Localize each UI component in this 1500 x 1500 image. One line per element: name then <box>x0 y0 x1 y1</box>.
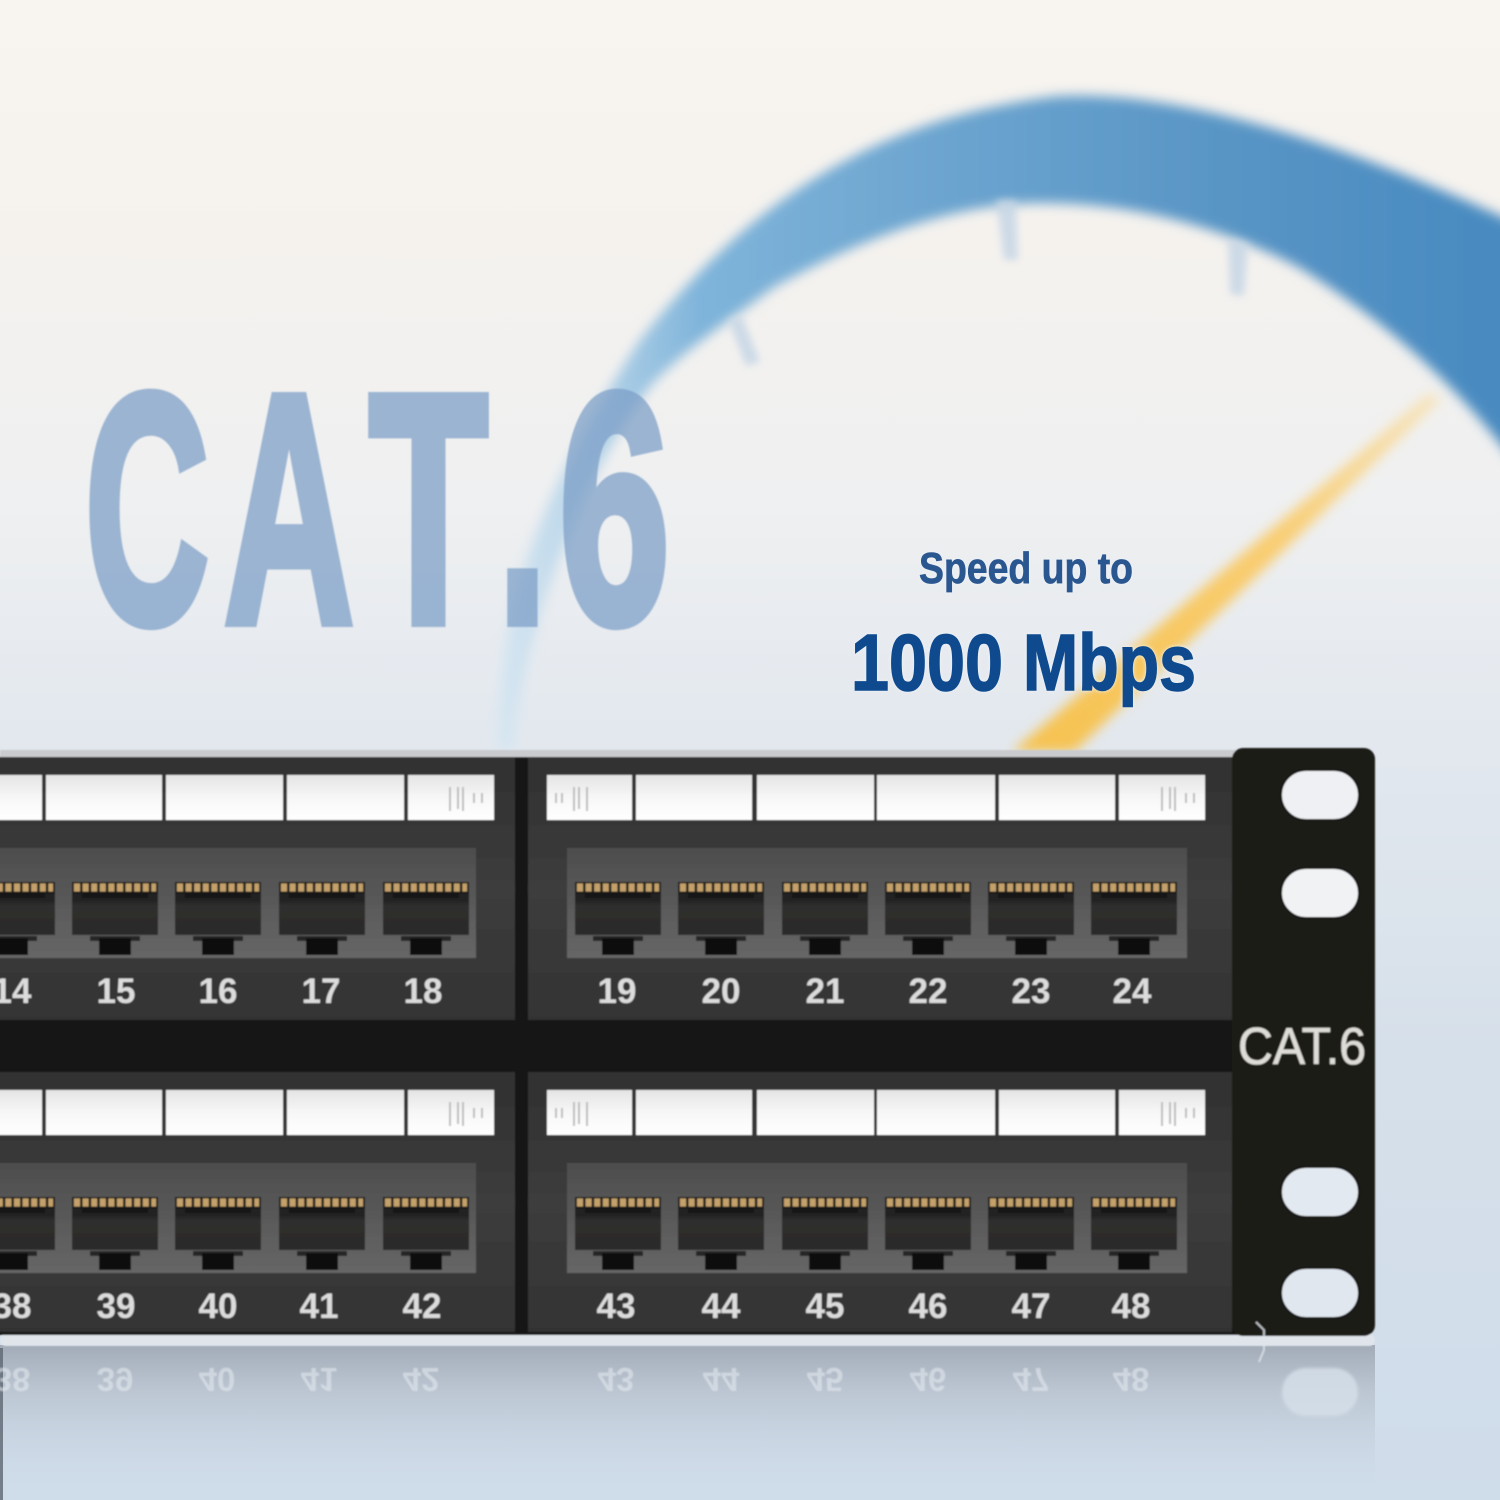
port numbers: 14-18 <box>0 972 442 1011</box>
heading: CAT.6: T <box>369 327 488 692</box>
speed gauge arc <box>498 96 1500 750</box>
port numbers: 19-24 <box>598 972 1152 1011</box>
heading: CAT.6 <box>85 327 670 692</box>
port numbers: 19-24: 20 <box>702 972 740 1011</box>
port numbers: 19-24: 22 <box>909 972 947 1011</box>
ear label: CAT.6: CAT.6 <box>1238 1018 1366 1076</box>
reflection under panel <box>0 1345 1375 1500</box>
reflection: mounting hole <box>1282 1368 1358 1416</box>
text: speed up to: Speed up to <box>919 544 1133 593</box>
heading: CAT.6: C <box>85 327 209 692</box>
panel top highlight <box>0 750 1240 758</box>
panel bottom highlight <box>0 1334 1375 1346</box>
port numbers: 38-42 <box>0 1287 441 1326</box>
gauge tick marks <box>728 200 1248 366</box>
reflection: left edge line <box>0 1348 3 1500</box>
port numbers: 14-18: 15 <box>97 972 135 1011</box>
panel section: bottom right <box>528 1072 1232 1332</box>
port numbers: 19-24: 19 <box>598 972 636 1011</box>
panel chassis <box>0 757 1240 1335</box>
port numbers: 19-24: 21 <box>806 972 844 1011</box>
port numbers: 43-48: 45 <box>806 1287 844 1326</box>
port numbers: 14-18: 17 <box>302 972 340 1011</box>
gauge needle <box>1012 394 1442 752</box>
panel section: top left <box>0 757 515 1020</box>
port numbers: 38-42: 42 <box>403 1287 441 1326</box>
port numbers: 14-18: 18 <box>404 972 442 1011</box>
reflection: port numbers: 44 <box>703 1361 740 1398</box>
reflection: port numbers: 45 <box>807 1361 843 1398</box>
port numbers: 38-42: 39 <box>97 1287 135 1326</box>
reflection: port numbers: 43 <box>598 1361 634 1398</box>
heading: CAT.6: 6 <box>559 327 670 692</box>
reflection: port numbers: 40 <box>199 1361 235 1398</box>
port numbers: 38-42: 41 <box>300 1287 338 1326</box>
port numbers: 43-48 <box>597 1287 1150 1326</box>
port numbers: 43-48: 46 <box>909 1287 947 1326</box>
rack ear <box>1232 748 1375 1336</box>
patch panel <box>0 748 1375 1362</box>
text: 1000 Mbps: Mbps <box>1023 618 1196 707</box>
panel section: bottom left <box>0 1072 515 1332</box>
port numbers: 19-24: 23 <box>1012 972 1050 1011</box>
heading: CAT.6: A <box>224 327 354 692</box>
text: 1000 Mbps <box>851 618 1196 707</box>
reflection: port numbers: 39 <box>97 1361 133 1398</box>
heading: CAT.6: . <box>498 327 547 692</box>
port numbers: 14-18: 16 <box>199 972 237 1011</box>
reflection: port numbers <box>0 1361 1149 1398</box>
mounting holes <box>1281 770 1359 1318</box>
port numbers: 43-48: 47 <box>1012 1287 1050 1326</box>
ear notch mark <box>1238 1322 1264 1362</box>
reflection: port numbers: 47 <box>1013 1361 1049 1398</box>
port numbers: 38-42: 40 <box>199 1287 237 1326</box>
text: 1000 Mbps: 1000 <box>851 618 1003 707</box>
reflection: port numbers: 41 <box>301 1361 337 1398</box>
panel section: top right <box>528 757 1232 1020</box>
reflection: port numbers: 42 <box>403 1361 439 1398</box>
reflection: port numbers: 46 <box>910 1361 946 1398</box>
port numbers: 43-48: 44 <box>702 1287 741 1326</box>
port numbers: 43-48: 43 <box>597 1287 635 1326</box>
reflection: port numbers: 48 <box>1113 1361 1149 1398</box>
port numbers: 43-48: 48 <box>1112 1287 1150 1326</box>
port numbers: 19-24: 24 <box>1113 972 1152 1011</box>
